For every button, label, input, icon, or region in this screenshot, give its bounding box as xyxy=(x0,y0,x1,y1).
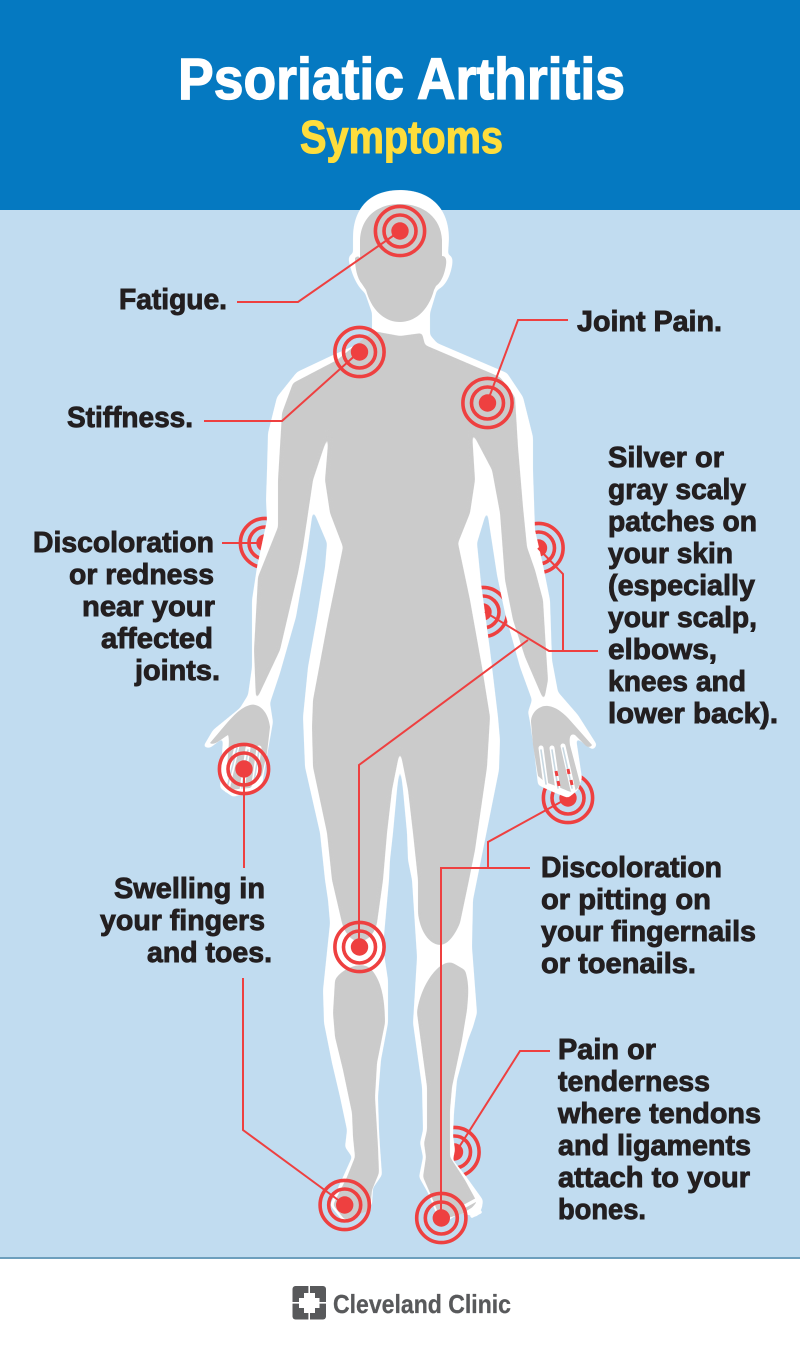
target: left elbow (behind body) xyxy=(240,518,290,568)
finger slits xyxy=(227,746,573,790)
label: discoloration or redness: or redness xyxy=(69,559,214,591)
label: discoloration or redness: affected xyxy=(101,623,213,655)
label: silver or gray scaly patches: gray scaly xyxy=(608,474,746,506)
label: silver or gray scaly patches: Silver or xyxy=(608,442,724,474)
logo: Cleveland Clinic: Cleveland Clinic xyxy=(333,1289,511,1319)
target: shoulder xyxy=(463,378,512,428)
footer xyxy=(0,1257,800,1352)
label: silver or gray scaly patches: your scalp, xyxy=(608,602,757,634)
label: nails: or pitting on xyxy=(541,884,711,916)
target: right elbow (behind body) xyxy=(514,523,563,573)
label: stiffness: Stiffness. xyxy=(67,402,193,434)
label: silver or gray scaly patches: patches on xyxy=(608,506,757,538)
label: nails: your fingernails xyxy=(541,916,756,948)
human body figure xyxy=(203,190,597,1225)
label: silver or gray scaly patches: knees and xyxy=(608,666,746,698)
label: silver or gray scaly patches: your skin xyxy=(608,538,733,570)
label: silver or gray scaly patches: elbows, xyxy=(608,634,717,666)
target: left foot xyxy=(320,1180,369,1230)
body panel background xyxy=(0,210,800,1258)
label: tendons and ligaments: where tendons xyxy=(557,1098,761,1130)
label: swelling xyxy=(100,873,272,969)
label: swelling: and toes. xyxy=(147,937,272,969)
label: discoloration or redness xyxy=(33,527,220,687)
target: right foot xyxy=(417,1193,466,1243)
label: silver or gray scaly patches: lower back). xyxy=(608,698,778,730)
gray head xyxy=(355,204,446,322)
label: discoloration or redness: Discoloration xyxy=(33,527,214,559)
callout lines xyxy=(204,231,598,1218)
label: nails: Discoloration xyxy=(541,852,722,884)
target: neck xyxy=(335,327,384,377)
title: Psoriatic Arthritis xyxy=(178,47,625,112)
label: swelling: Swelling in xyxy=(114,873,265,905)
target: inner forearm (behind body) xyxy=(458,587,508,637)
target: right hand fingers (behind body) xyxy=(543,773,593,823)
target: right ankle (behind body) xyxy=(430,1127,479,1177)
label: tendons and ligaments xyxy=(557,1034,761,1226)
subtitle: Symptoms xyxy=(300,111,503,163)
label: tendons and ligaments: attach to your xyxy=(558,1162,750,1194)
toes xyxy=(465,1200,480,1216)
ring traces between fingers xyxy=(556,769,572,786)
label: tendons and ligaments: tenderness xyxy=(558,1066,710,1098)
label: joint pain: Joint Pain. xyxy=(577,306,722,338)
target: left hand xyxy=(219,744,269,794)
label: discoloration or redness: joints. xyxy=(134,655,220,687)
label: fatigue: Fatigue. xyxy=(119,284,227,316)
target: knee xyxy=(335,922,384,972)
label: discoloration or redness: near your xyxy=(82,591,215,623)
gray left calf and foot xyxy=(333,965,385,1220)
gray right calf and foot xyxy=(417,962,477,1220)
label: silver or gray scaly patches: (especially xyxy=(608,570,755,602)
target: head xyxy=(375,206,425,256)
gray right hand xyxy=(531,706,592,792)
white body outline xyxy=(203,190,597,1225)
gray torso and arms xyxy=(254,331,548,945)
label: tendons and ligaments: and ligaments xyxy=(558,1130,751,1162)
logo: Cleveland Clinic xyxy=(292,1286,511,1320)
header band xyxy=(0,0,800,210)
label: nails xyxy=(541,852,756,980)
icon: cross mark xyxy=(292,1286,326,1320)
label: swelling: your fingers xyxy=(100,905,265,937)
label: tendons and ligaments: Pain or xyxy=(558,1034,656,1066)
gray left hand xyxy=(210,705,270,790)
label: silver or gray scaly patches xyxy=(608,442,778,730)
label: nails: or toenails. xyxy=(541,948,696,980)
label: tendons and ligaments: bones. xyxy=(558,1194,646,1226)
